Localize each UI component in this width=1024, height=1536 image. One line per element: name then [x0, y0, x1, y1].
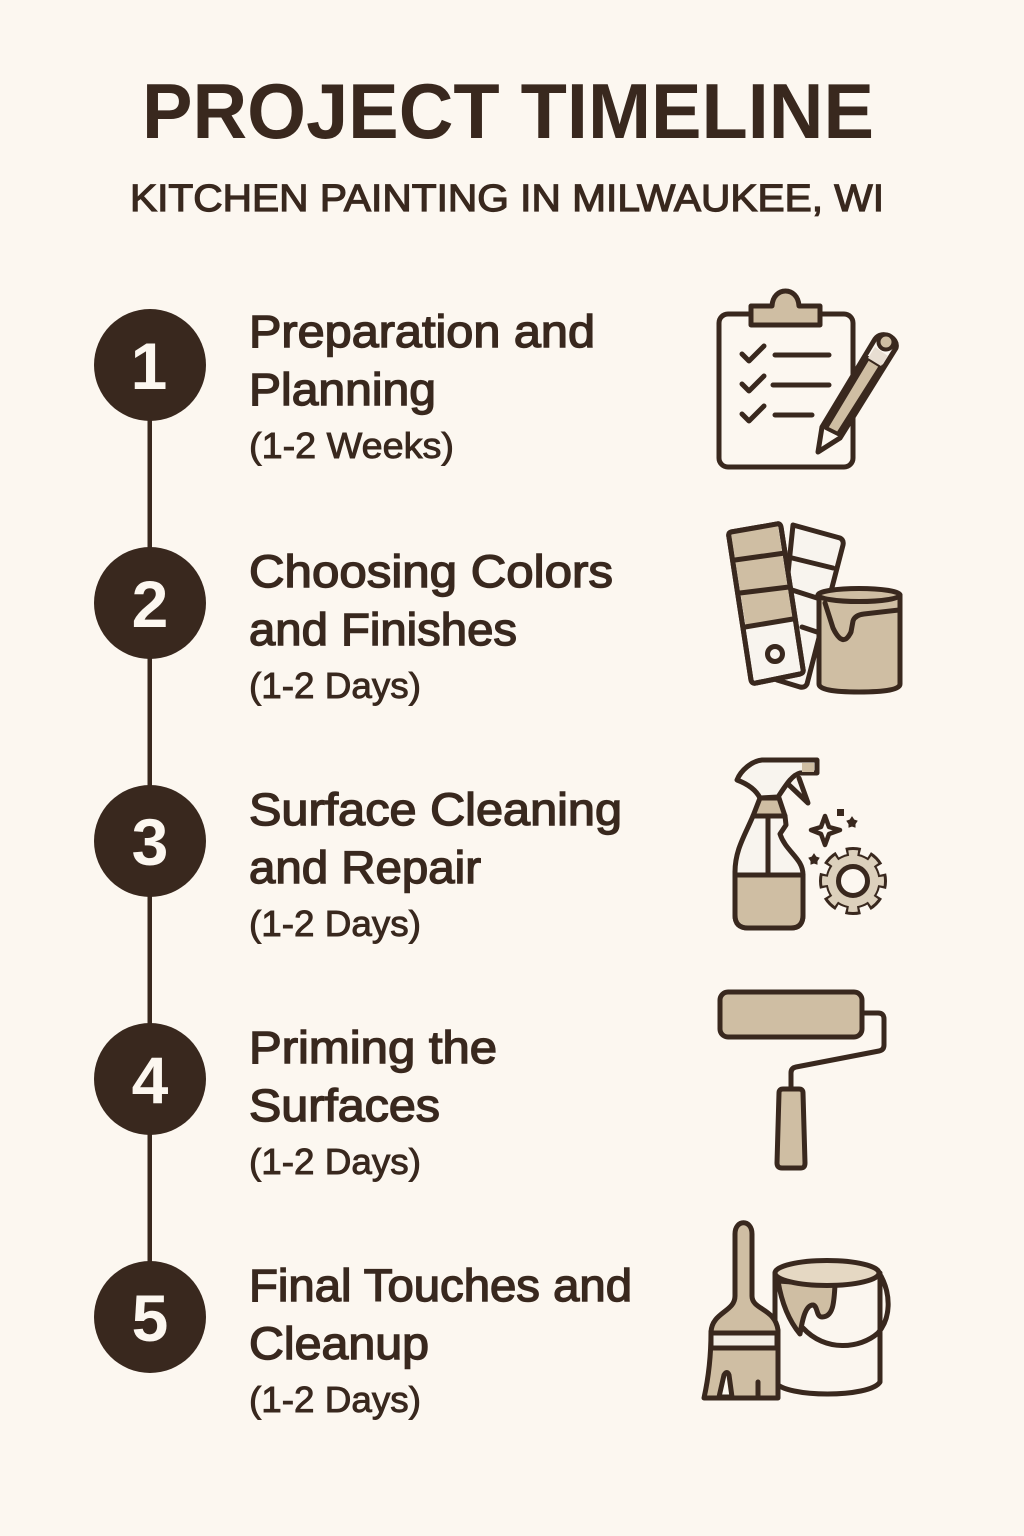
step 3 number badge: 3 [132, 805, 168, 879]
step 4 text: (1-2 Days) [249, 1141, 421, 1182]
step 5 number badge: 5 [132, 1281, 168, 1355]
step 3 text [249, 784, 622, 944]
step 4 number badge: 4 [132, 1043, 169, 1117]
step 1 text [249, 306, 595, 466]
step 2 text [249, 546, 613, 706]
icon: spray bottle, sparkles and gear [735, 760, 882, 928]
step 1 number badge: 1 [131, 329, 167, 403]
step 5 text [249, 1260, 632, 1420]
step 4 text: Priming the [249, 1022, 497, 1073]
timeline connector line [148, 365, 152, 1317]
step 1 number badge [94, 309, 206, 421]
step 2 text: (1-2 Days) [249, 665, 421, 706]
icon: paint brush and paint bucket [704, 1223, 888, 1398]
subtitle: KITCHEN PAINTING IN MILWAUKEE, WI [130, 178, 884, 220]
icon: colour swatches and paint can [729, 524, 900, 692]
step 5 text: (1-2 Days) [249, 1379, 421, 1420]
step 1 text: (1-2 Weeks) [249, 425, 454, 466]
step 2 number badge: 2 [132, 567, 168, 641]
step 1 text: Preparation and [249, 306, 595, 357]
step 3 text: Surface Cleaning [249, 784, 622, 835]
step 4 number badge [94, 1023, 206, 1135]
step 3 text: and Repair [249, 842, 481, 893]
step 2 text: and Finishes [249, 604, 517, 655]
step 2 number badge [94, 547, 206, 659]
step 3 text: (1-2 Days) [249, 903, 421, 944]
icon: paint roller [720, 992, 884, 1168]
step 3 number badge [94, 785, 206, 897]
step 5 number badge [94, 1261, 206, 1373]
title: PROJECT TIMELINE [142, 67, 874, 155]
step 4 text: Surfaces [249, 1080, 440, 1131]
icon: clipboard and pencil [719, 291, 896, 467]
step 4 text [249, 1022, 497, 1182]
step 1 text: Planning [249, 364, 436, 415]
step 2 text: Choosing Colors [249, 546, 613, 597]
step 5 text: Final Touches and [249, 1260, 632, 1311]
step 5 text: Cleanup [249, 1318, 429, 1369]
